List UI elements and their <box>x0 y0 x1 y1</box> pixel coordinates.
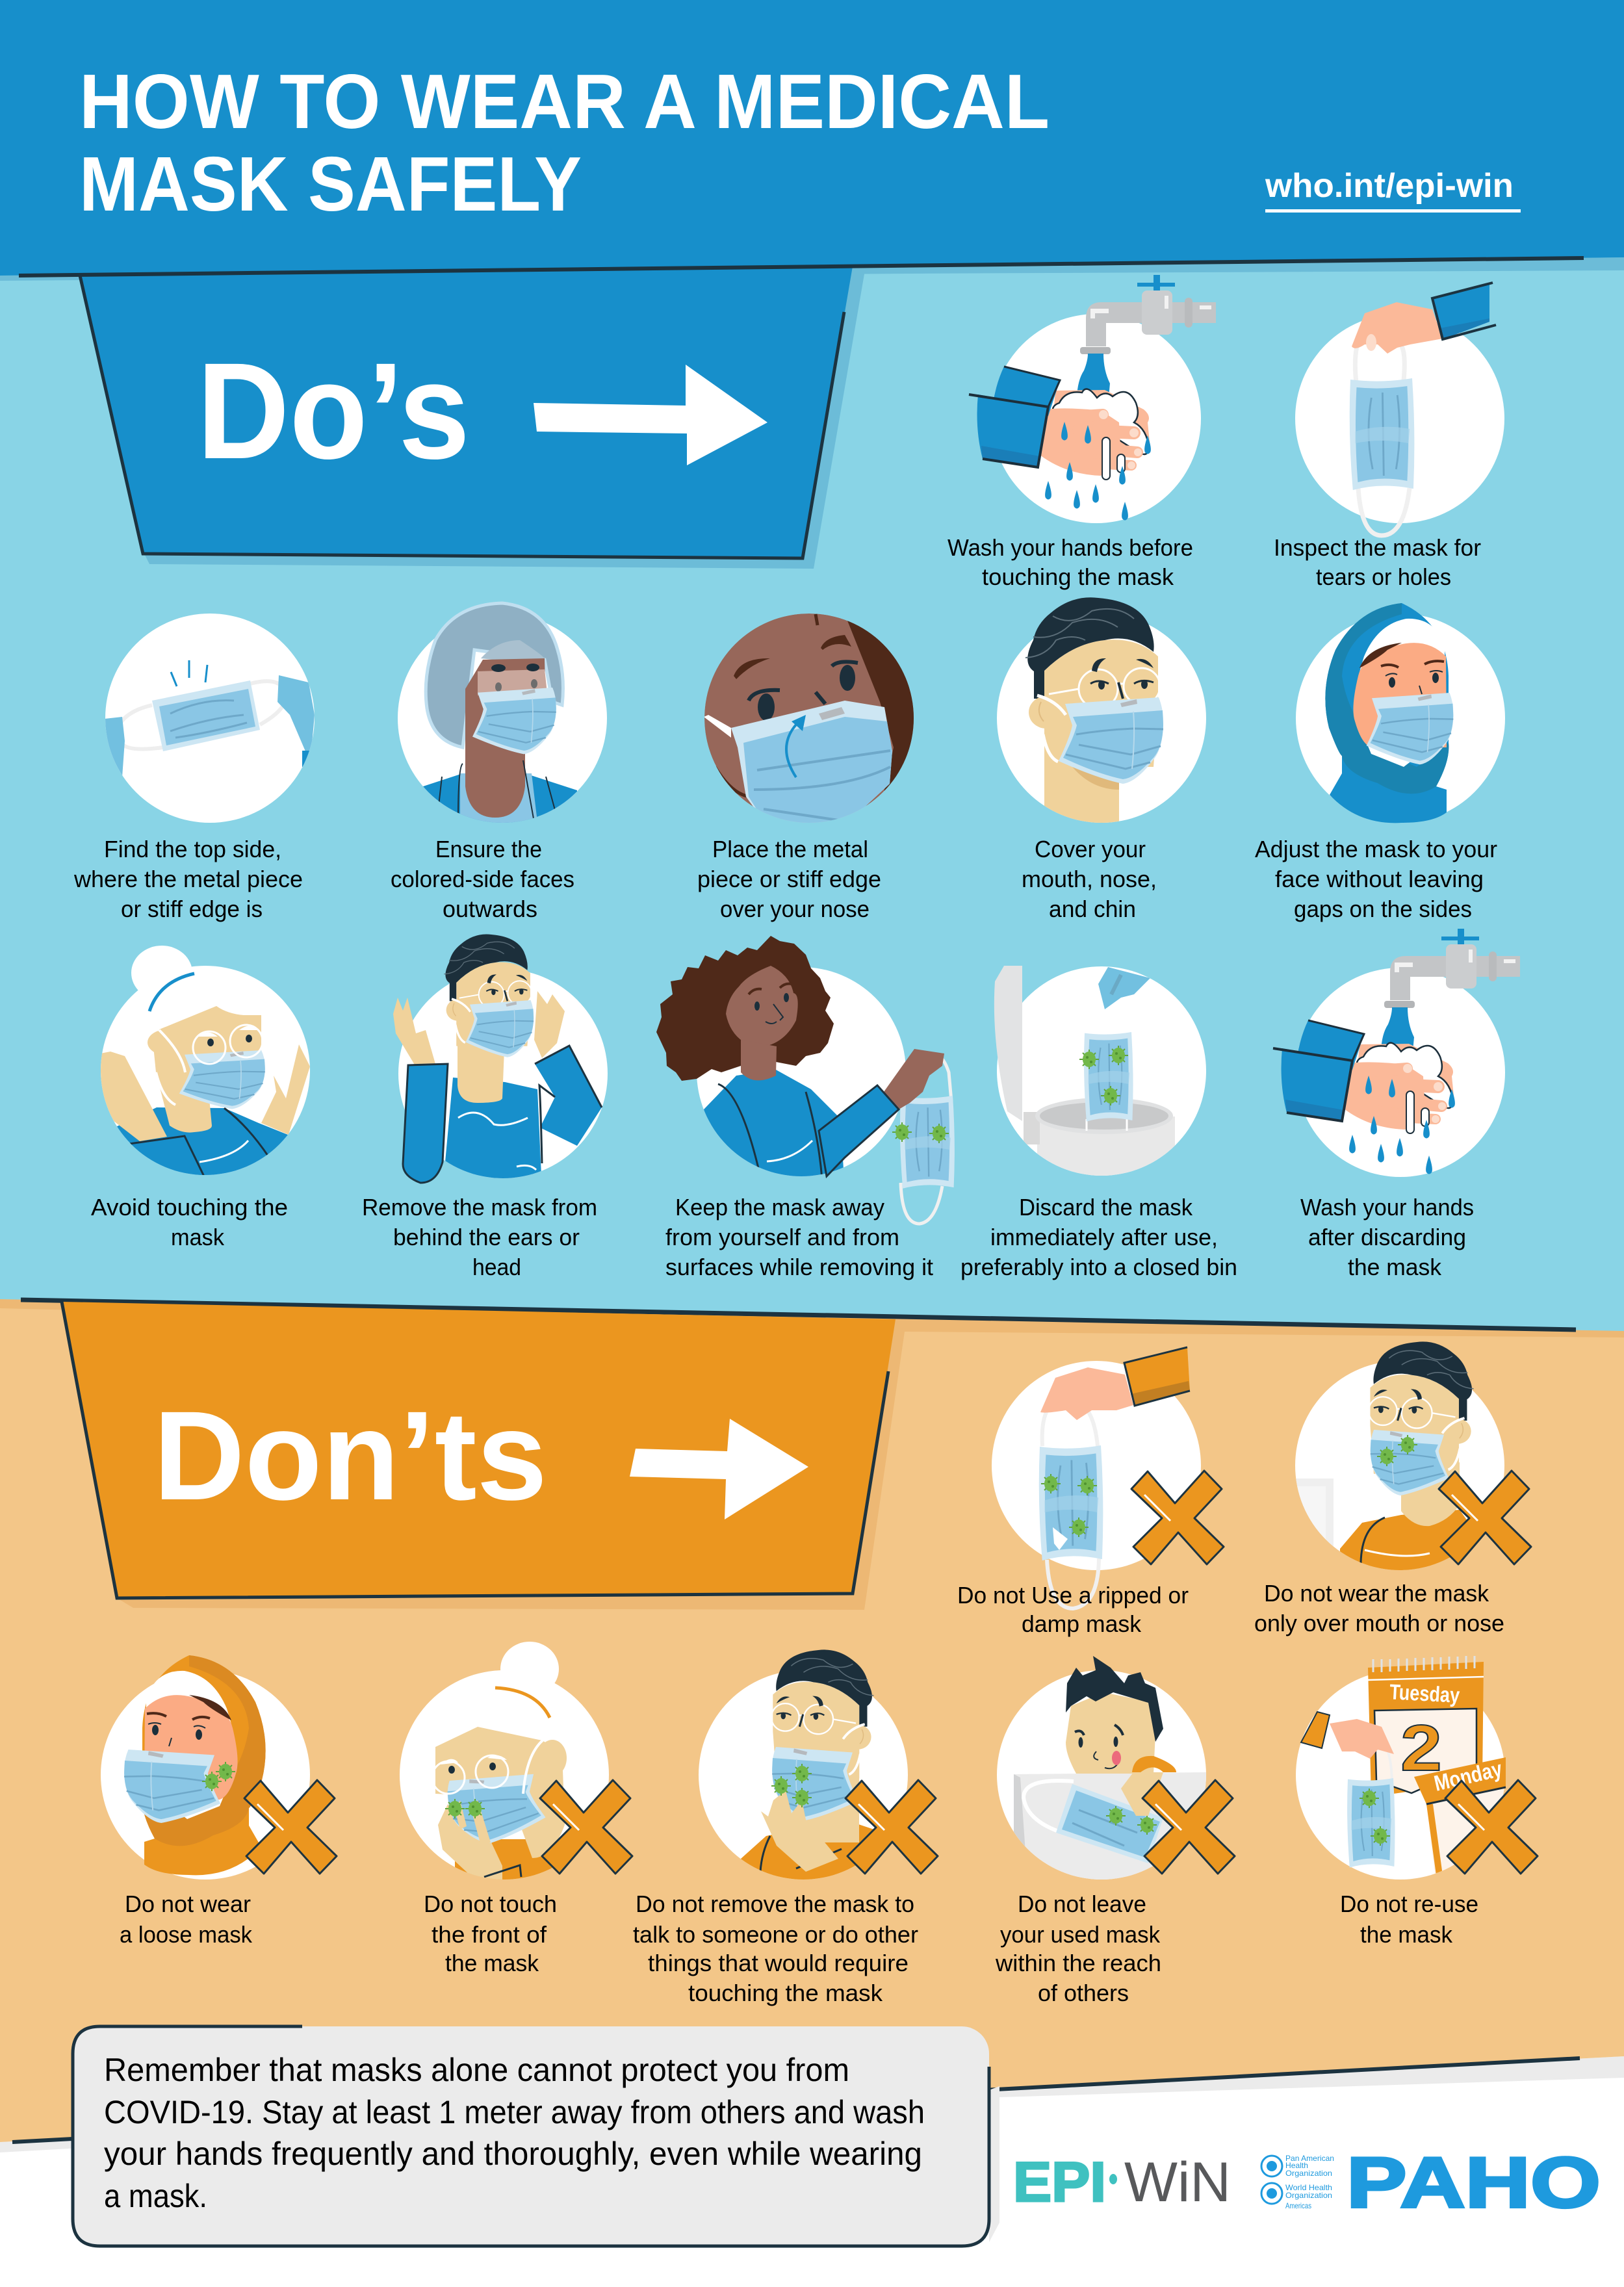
caption: Discard the mask <box>1019 1194 1193 1221</box>
caption: of others <box>1038 1980 1129 2006</box>
callout: reminder box: Remember that masks alone cannot protect you from <box>104 2052 849 2088</box>
step: keep the mask away <box>656 936 955 1280</box>
panel: Do's heading <box>80 266 866 569</box>
icon: x mark <box>845 1780 938 1874</box>
step: remove the mask from behind ears <box>362 935 608 1280</box>
caption: immediately after use, <box>990 1224 1218 1250</box>
caption: Inspect the mask for <box>1274 534 1481 561</box>
icon: man wearing mask <box>1025 597 1163 829</box>
step: avoid touching the mask <box>91 946 310 1250</box>
icon: hand holding ripped mask <box>1039 1347 1190 1609</box>
step: do not touch the front <box>400 1642 632 1976</box>
logo: EPI-WIN <box>1013 2151 1231 2214</box>
step: discard the mask <box>960 966 1237 1280</box>
panel: Don'ts heading: Don’ts <box>153 1385 547 1527</box>
icon: man removing mask <box>393 935 602 1189</box>
caption <box>957 1582 1189 1637</box>
caption: surfaces while removing it <box>665 1254 933 1280</box>
icon: woman holding mask away <box>656 936 955 1224</box>
logo: WHO and Pan American Health Organization <box>1261 2154 1334 2210</box>
icon: older woman touching mask <box>432 1642 572 1885</box>
icon: x mark <box>540 1780 632 1874</box>
caption <box>697 836 881 922</box>
icon: woman in blue hijab <box>1325 603 1453 823</box>
caption: over your nose <box>720 896 870 922</box>
logo: WHO and Pan American Health Organization: World Health <box>1285 2183 1332 2192</box>
caption: the front of <box>432 1921 547 1948</box>
caption: things that would require <box>648 1950 909 1976</box>
icon: x mark <box>244 1780 337 1874</box>
step: do not use ripped mask <box>957 1347 1224 1637</box>
caption <box>1255 836 1497 922</box>
caption <box>960 1194 1237 1280</box>
caption: Do not re-use <box>1340 1891 1478 1917</box>
icon: calendar and mask: Monday <box>1432 1757 1504 1796</box>
caption: Place the metal <box>712 836 868 862</box>
step: do not wear only over mouth <box>1254 1341 1531 1636</box>
caption: Wash your hands <box>1300 1194 1474 1221</box>
icon: faucet and washing hands <box>1273 929 1520 1174</box>
caption: preferably into a closed bin <box>960 1254 1237 1280</box>
step: find the top side <box>73 614 316 922</box>
caption: Avoid touching the <box>91 1194 288 1221</box>
caption: Keep the mask away <box>675 1194 884 1221</box>
caption <box>1340 1891 1478 1948</box>
caption: tears or holes <box>1316 563 1451 590</box>
caption: Adjust the mask to your <box>1255 836 1497 862</box>
caption <box>633 1891 918 2006</box>
icon: faucet and washing hands <box>969 275 1216 520</box>
logo: EPI-WIN: EPI <box>1013 2151 1106 2214</box>
caption: only over mouth or nose <box>1254 1610 1504 1636</box>
panel: Don'ts heading <box>62 1302 905 1610</box>
caption: after discarding <box>1308 1224 1466 1250</box>
title: MASK SAFELY <box>79 141 582 227</box>
caption <box>995 1891 1161 2006</box>
caption: Wash your hands before <box>947 534 1193 561</box>
caption: within the reach <box>995 1950 1161 1976</box>
caption: face without leaving <box>1275 866 1484 892</box>
icon: mask dropped into bin <box>994 966 1175 1188</box>
caption: mouth, nose, <box>1022 866 1157 892</box>
icon: calendar and mask: 2 <box>1400 1712 1442 1785</box>
step: cover mouth nose chin <box>997 597 1206 922</box>
caption: the mask <box>1348 1254 1442 1280</box>
logo: WHO and Pan American Health Organization: Americas <box>1285 2201 1311 2210</box>
icon: woman in orange hijab with loose mask <box>124 1655 266 1875</box>
icon: man with mask below nose <box>1296 1341 1474 1570</box>
caption: Do not Use a ripped or <box>957 1582 1189 1609</box>
caption: Remove the mask from <box>362 1194 597 1221</box>
icon: close-up face with mask and arrow <box>704 614 920 825</box>
icon: x mark <box>1131 1471 1224 1564</box>
caption: where the metal piece <box>73 866 303 892</box>
caption <box>362 1194 597 1280</box>
caption <box>391 836 574 922</box>
caption: the mask <box>1360 1921 1453 1948</box>
caption <box>91 1194 288 1250</box>
callout: reminder box: COVID-19. Stay at least 1 meter away from others and wash <box>104 2094 925 2130</box>
step: do not wear a loose mask <box>101 1655 337 1948</box>
callout: reminder box <box>73 2026 999 2246</box>
caption: Cover your <box>1035 836 1146 862</box>
step: wash hands after discarding <box>1273 929 1520 1280</box>
step: place the metal piece over nose <box>697 614 920 922</box>
step: wash hands before <box>947 275 1216 590</box>
icon: x mark <box>1142 1780 1235 1874</box>
icon: health worker with face shield <box>423 602 577 823</box>
step: do not re-use the mask <box>1296 1656 1538 1948</box>
caption: piece or stiff edge <box>697 866 881 892</box>
header band <box>0 0 1624 276</box>
step: colored side outwards <box>391 603 607 922</box>
caption <box>665 1194 933 1280</box>
caption: outwards <box>443 896 537 922</box>
icon: calendar and mask <box>1301 1656 1514 1885</box>
caption: Find the top side, <box>104 836 281 862</box>
caption: behind the ears or <box>393 1224 580 1250</box>
caption <box>1274 534 1481 590</box>
step: inspect the mask <box>1274 283 1504 590</box>
caption <box>947 534 1193 590</box>
logo: WHO and Pan American Health Organization: Pan American <box>1285 2154 1334 2163</box>
step: do not leave used mask <box>995 1656 1235 2006</box>
logo: PAHO: PAHO <box>1347 2143 1601 2223</box>
caption: Do not leave <box>1018 1891 1146 1917</box>
caption: your used mask <box>1000 1921 1161 1948</box>
step: do not remove mask to talk <box>633 1649 938 2006</box>
caption <box>1022 836 1157 922</box>
caption: Do not remove the mask to <box>636 1891 914 1917</box>
caption: from yourself and from <box>665 1224 899 1250</box>
title: HOW TO WEAR A MEDICAL <box>79 58 1050 145</box>
caption: Do not wear the mask <box>1264 1580 1489 1607</box>
icon: x mark <box>1445 1780 1538 1874</box>
callout: reminder box: your hands frequently and thoroughly, even while wearing <box>104 2136 922 2172</box>
caption: or stiff edge is <box>121 896 263 922</box>
logo: WHO and Pan American Health Organization: Health <box>1285 2161 1308 2170</box>
caption: a loose mask <box>120 1921 253 1948</box>
step: adjust the mask <box>1255 603 1505 922</box>
caption <box>1254 1580 1504 1636</box>
icon: hand holding mask <box>1350 283 1496 536</box>
logo: WHO and Pan American Health Organization: Organization <box>1285 2169 1332 2178</box>
website link: who.int/epi-win <box>1265 167 1514 205</box>
icon: child reaching for used mask <box>1014 1656 1207 1885</box>
caption: touching the mask <box>982 563 1174 590</box>
caption: and chin <box>1049 896 1136 922</box>
caption: Ensure the <box>435 836 542 862</box>
panel: Do's heading: Do’s <box>197 334 470 487</box>
caption <box>1300 1194 1474 1280</box>
caption <box>120 1891 253 1948</box>
caption <box>424 1891 557 1976</box>
logo: EPI-WIN: WiN <box>1124 2151 1231 2214</box>
caption: the mask <box>445 1950 539 1976</box>
caption: Do not touch <box>424 1891 557 1917</box>
icon: older woman with hands raised <box>100 946 310 1189</box>
caption: colored-side faces <box>391 866 574 892</box>
caption: Do not wear <box>125 1891 251 1917</box>
caption <box>73 836 303 922</box>
caption: damp mask <box>1022 1610 1142 1637</box>
icon: calendar and mask: Tuesday <box>1389 1679 1461 1707</box>
icon: man pulling mask with fingers <box>741 1649 874 1885</box>
caption: gaps on the sides <box>1294 896 1472 922</box>
caption: head <box>472 1254 521 1280</box>
caption: talk to someone or do other <box>633 1921 918 1948</box>
icon: gloved hands holding mask <box>105 660 316 780</box>
callout: reminder box: a mask. <box>104 2178 207 2214</box>
icon: x mark <box>1439 1471 1531 1564</box>
logo: WHO and Pan American Health Organization: Organization <box>1285 2191 1332 2200</box>
caption: touching the mask <box>688 1980 883 2006</box>
caption: mask <box>171 1224 225 1250</box>
title <box>79 58 1050 227</box>
